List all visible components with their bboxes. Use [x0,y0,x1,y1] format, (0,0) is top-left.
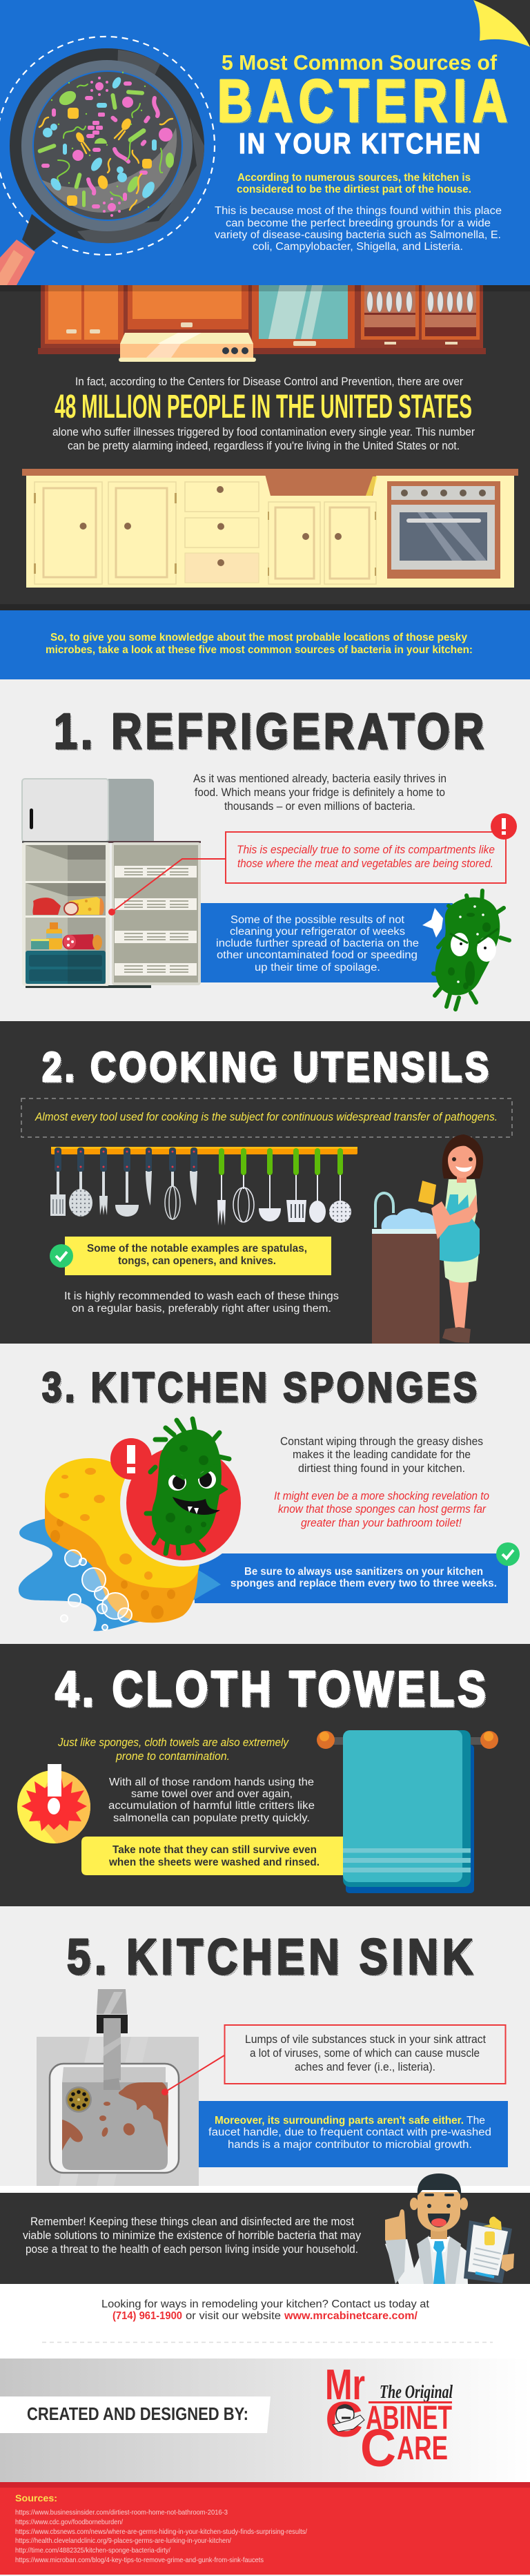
oven [387,481,500,579]
callout: blue box: Be sure to always use sanitizers on your kitchen [244,1566,483,1578]
intro body text: can become the perfect breeding grounds for a wide [226,217,491,229]
panel: credits [0,2359,530,2482]
statistic text: can be pretty alarming indeed, regardless if you're living in the United States or not. [68,439,460,452]
callout: red box: those where the meat and vegetables are being stored. [237,857,493,870]
body text: With all of those random hands using the [109,1776,314,1788]
body text: on a regular basis, preferably right after using them. [72,1303,331,1315]
source links: https://health.clevelandclinic.org/9-places-germs-are-lurking-in-your-kitchen/ [15,2537,231,2545]
callout: red box: Lumps of vile substances stuck in your sink attract [245,2033,486,2046]
icon: alert [491,813,517,840]
body text: same towel over and over again, [131,1788,293,1800]
callout: blue box: sponges and replace them every two to three weeks. [230,1578,497,1589]
heading: 2. COOKING UTENSILS [43,1045,490,1092]
illustration: sponge in water [19,1458,221,1631]
callout: yellow note [50,1237,331,1275]
callout: blue box [195,1542,520,1603]
panel: sources: Sources: [15,2492,57,2504]
grime stains [62,2082,168,2151]
heading: 2. COOKING UTENSILS [42,1044,489,1090]
reminder text: pose a threat to the health of each person living inside your household. [26,2243,358,2256]
heading: 5. KITCHEN SINK [67,1930,473,1985]
body text: food. Which means your fridge is definitely a home to [195,786,445,799]
body text [64,1290,339,1315]
callout: blue box [199,2101,508,2167]
intro highlighted text [237,172,471,195]
source links: https://www.cdc.gov/foodborneburden/ [15,2518,123,2526]
illustration: woman washing dishes [372,1134,483,1344]
drain [66,2086,92,2113]
intro highlighted text: considered to be the dirtiest part of the house. [237,184,471,195]
panel: hero [0,0,530,285]
heading: 3. KITCHEN SPONGES [42,1364,477,1411]
callout: blue box: hands is a major contributor to microbial growth. [228,2139,472,2151]
callout: blue box: The [467,2115,485,2127]
mascot [333,2405,364,2432]
heading: 5. KITCHEN SINK [68,1931,474,1986]
callout: red box [161,2025,505,2095]
illustration: doctor [385,2173,514,2284]
logo: mr cabinet care: C [325,2392,363,2448]
callout: blue box: other uncontaminated food or speeding [217,949,418,961]
panel: contact [0,2284,530,2359]
soap bubbles [61,1550,132,1630]
callout: blue box: include further spread of bacteria on the [216,938,419,949]
lower kitchen cabinets [22,469,518,588]
icon: towel on rod [317,1730,498,1893]
panel: 3 kitchen sponges [0,1344,530,1644]
warning text: It might even be a more shocking revelation to [274,1489,489,1502]
source links: http://time.com/4882325/kitchen-sponge-bacteria-dirty/ [15,2546,170,2555]
logo: mr cabinet care [325,2361,453,2478]
callout: red box [108,813,517,916]
callout: blue box: faucet handle, due to frequent contact with pre-washed [208,2127,491,2138]
callout: yellow note: Some of the notable examples are spatulas, [87,1243,307,1255]
heading: 4. CLOTH TOWELS [57,1663,487,1718]
body text: Constant wiping through the greasy dishes [280,1435,483,1448]
body text [193,772,446,813]
logo: mr cabinet care: ABINET [366,2400,452,2437]
icon: page curl [473,0,530,47]
door shelves [115,866,197,976]
icon: alert [110,1438,152,1480]
callout: blue box [201,903,453,982]
callout: blue box: up their time of spoilage. [255,962,380,974]
panel: contact: Looking for ways in remodeling your kitchen? Contact us today at [101,2298,430,2310]
title line 2: bacteria: BACTERIA [219,69,509,136]
callout: red box: a lot of viruses, some of which can cause muscle [250,2046,480,2060]
icon: utensil rail [50,1147,357,1226]
callout: yellow note: tongs, can openers, and knives. [118,1255,276,1267]
callout: yellow note: Take note that they can still survive even [112,1844,317,1856]
warning text [274,1489,489,1529]
intro body text: coli, Campylobacter, Shigella, and Listeria. [253,241,463,253]
credit banner [0,2396,271,2433]
panel: contact: (714) 961-1900 [112,2310,182,2322]
highlighted text: Just like sponges, cloth towels are also extremely [57,1736,289,1749]
title line 3: IN YOUR KITCHEN [239,128,480,160]
body text: As it was mentioned already, bacteria easily thrives in [193,772,446,785]
title line 2: bacteria: BACTERIA [217,68,507,135]
logo: mr cabinet care: The Original [380,2381,453,2402]
body text: It is highly recommended to wash each of these things [64,1290,339,1302]
panel: transition text [0,610,530,679]
logo: mr cabinet care: C [360,2419,396,2478]
callout: red box: aches and fever (i.e., listeria). [295,2060,435,2073]
illustration: dirty sink [37,1989,199,2186]
panel: 4 cloth towels [0,1644,530,1906]
highlighted text [57,1736,289,1763]
callout: blue box: cleaning your refrigerator of weeks [230,926,405,938]
body text: dirtiest thing found in your kitchen. [298,1462,465,1475]
icon: fridge [22,779,201,988]
logo: mr cabinet care: ARE [397,2430,448,2467]
heading: 3. KITCHEN SPONGES [43,1366,478,1412]
intro highlighted text: According to numerous sources, the kitchen is [237,172,471,184]
body text [108,1776,315,1824]
body text: thousands – or even millions of bacteria. [224,800,415,813]
panel: statistic [0,285,530,611]
heading: 4. CLOTH TOWELS [55,1662,486,1717]
highlighted text: prone to contamination. [115,1750,230,1763]
callout: red box: This is especially true to some of its compartments like [237,843,495,856]
panel: transition text: So, to give you some knowledge about the most probable locations of those pesky [50,632,467,643]
panel: 5 kitchen sink [0,1906,530,2193]
panel: 2 cooking utensils [0,1021,530,1344]
refrigerator food [31,897,104,950]
statistic text [52,375,475,452]
panel: closing reminder [0,2173,530,2284]
icon: warning burst [17,1764,90,1843]
reminder text [23,2215,361,2256]
upper kitchen cabinets [0,285,530,354]
dashed callout: Almost every tool used for cooking is the subject for continuous widespread transfer of pathogens. [35,1110,498,1123]
icon: red circle and germ [110,1419,247,1567]
body text [280,1435,483,1475]
bacteria cluster [37,72,174,217]
callout: blue box: Some of the possible results of not [230,914,405,926]
source links: https://www.cbsnews.com/news/where-are-germs-hiding-in-your-kitchen-study-finds-surprising-results/ [15,2528,307,2536]
panel: 1 refrigerator [0,679,530,1021]
body text: salmonella can populate pretty quickly. [113,1812,310,1824]
heading: 1. REFRIGERATOR [55,706,485,761]
icon: angry germ [433,891,509,1009]
credit banner: CREATED AND DESIGNED BY: [27,2403,248,2424]
panel: sources [0,2482,530,2576]
range hood [119,333,256,362]
icon: check [50,1244,73,1268]
panel: contact: www.mrcabinetcare.com/ [284,2310,418,2322]
statistic text: In fact, according to the Centers for Disease Control and Prevention, there are over [75,375,463,388]
heading: 1. REFRIGERATOR [54,704,484,759]
icon: magnifying glass with bacteria [0,37,215,285]
panel: transition text: microbes, take a look at these five most common sources of bacteria in your kitchen: [46,644,473,656]
body text: makes it the leading candidate for the [293,1448,471,1461]
callout: yellow note: when the sheets were washed and rinsed. [108,1857,320,1868]
title [217,50,509,160]
callout: yellow note [81,1837,345,1875]
title line 1: 5 Most Common Sources of [222,50,498,75]
statistic text: alone who suffer illnesses triggered by food contamination every single year. This number [52,425,475,438]
body text: accumulation of harmful little critters like [108,1800,315,1812]
source links: https://www.microban.com/blog/4-key-tips-to-remove-grime-and-gunk-from-sink-faucets [15,2556,264,2564]
intro body text: variety of disease-causing bacteria such as Salmonella, E. [215,229,501,241]
intro body text: This is because most of the things found within this place [215,205,502,217]
logo: mr cabinet care: Mr [325,2361,365,2409]
reminder text: Remember! Keeping these things clean and disinfected are the most [30,2215,354,2228]
warning text: know that those sponges can host germs far [278,1502,487,1515]
panel: contact: or visit our website [186,2310,281,2322]
reminder text: viable solutions to minimize the existence of horrible bacteria that may [23,2229,361,2242]
icon: check [496,1542,520,1566]
source links: https://www.businessinsider.com/dirtiest-room-home-not-bathroom-2016-3 [15,2508,228,2517]
callout: blue box: Moreover, its surrounding parts aren't safe either. [215,2115,464,2127]
dashed callout [21,1098,512,1137]
source links [15,2508,307,2564]
intro body text [215,205,502,253]
warning text: greater than your bathroom toilet! [301,1516,462,1529]
